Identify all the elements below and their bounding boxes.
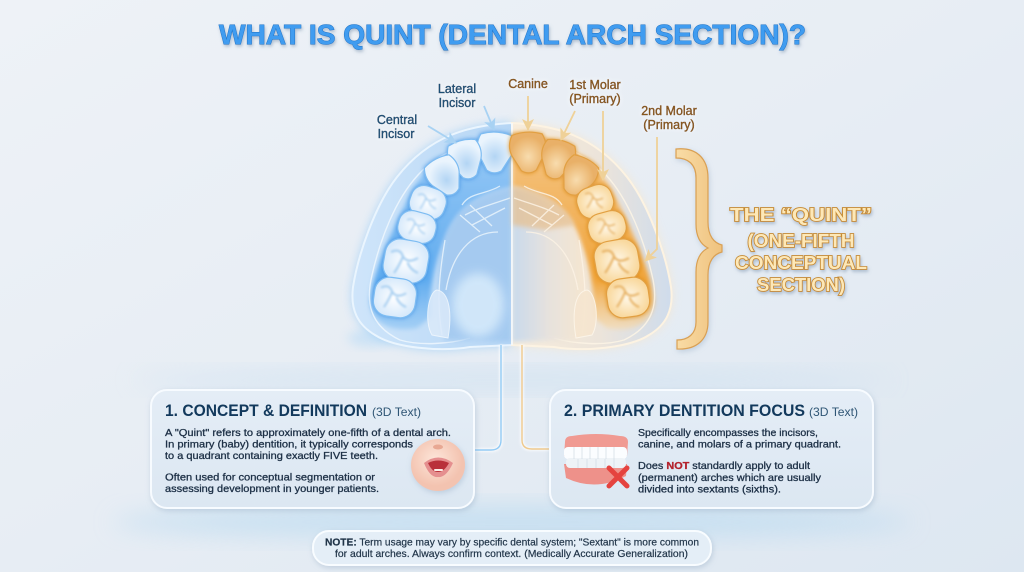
panel 1 body text: to a quadrant containing exactly FIVE teeth. — [165, 450, 378, 462]
panel 1 body text: assessing development in younger patients. — [165, 483, 379, 495]
quint callout: (ONE-FIFTH — [748, 231, 854, 251]
panel 2 body text — [638, 427, 841, 496]
arrow: lateral incisor — [484, 106, 494, 130]
orange tooth fissures — [585, 193, 639, 307]
title: WHAT IS QUINT (DENTAL ARCH SECTION)? — [219, 19, 806, 50]
label: 1st molar: 1st Molar — [569, 78, 621, 92]
midline — [511, 123, 513, 345]
blue tooth fissures — [381, 194, 436, 307]
panel 2 body text: Specifically encompasses the incisors, — [638, 427, 818, 439]
icon: adult dentures with red cross — [564, 434, 628, 486]
arch right half: orange — [512, 123, 672, 349]
connector: arch to panel 1 — [474, 345, 501, 450]
heading 1: 1. CONCEPT & DEFINITION — [165, 402, 367, 420]
arrow: central incisor — [428, 126, 456, 143]
quint callout: CONCEPTUAL — [735, 253, 867, 273]
panel 2: primary dentition focus — [550, 390, 873, 508]
orange teeth — [509, 131, 652, 320]
glow around arch — [348, 123, 672, 349]
label: central incisor: Central — [377, 113, 417, 127]
label: lateral incisor: Incisor — [439, 96, 475, 110]
heading 2 note: (3D Text) — [809, 405, 858, 419]
icon: baby mouth — [411, 439, 465, 491]
heading 2: 2. PRIMARY DENTITION FOCUS — [564, 402, 805, 420]
heading 1 note: (3D Text) — [372, 405, 421, 419]
arrow: first molar upper — [561, 111, 575, 140]
blue teeth — [371, 131, 514, 320]
quint callout — [730, 205, 872, 295]
note: for adult arches. Always confirm context. (Medically Accurate Generalization) — [335, 548, 688, 560]
panel 2 body text: divided into sextants (sixths). — [638, 484, 781, 496]
connector: arch to panel 2 — [522, 345, 550, 449]
panel 2 body text: (permanent) arches which are usually — [638, 472, 822, 484]
arrow: second molar — [645, 137, 657, 261]
label: central incisor: Incisor — [378, 127, 414, 141]
arrow: first molar lower — [602, 111, 604, 180]
panel 1 body text: In primary (baby) dentition, it typically corresponds — [165, 438, 413, 450]
quint callout: THE “QUINT” — [730, 205, 872, 225]
panel 2 body text: canine, and molars of a primary quadrant. — [638, 438, 841, 450]
panel 2 body text: Does NOT standardly apply to adult — [638, 460, 810, 472]
panel 1 body text: Often used for conceptual segmentation or — [165, 472, 376, 484]
arrow: canine — [527, 96, 529, 130]
panel 1 body text: A "Quint" refers to approximately one-fifth of a dental arch. — [165, 427, 451, 439]
label: 1st molar: (Primary) — [569, 92, 621, 106]
arrows to teeth — [428, 96, 657, 261]
label: 2nd molar: (Primary) — [643, 118, 695, 132]
label: lateral incisor: Lateral — [438, 82, 476, 96]
panel 1: concept and definition — [151, 390, 474, 508]
arch left half: blue — [352, 123, 512, 349]
note: NOTE: Term usage may vary by specific dental system; "Sextant" is more common — [325, 536, 699, 548]
tooth labels — [377, 77, 697, 141]
quint callout: SECTION) — [757, 275, 845, 295]
note — [313, 531, 711, 565]
curly brace — [676, 149, 722, 349]
label: canine: Canine — [508, 77, 548, 91]
dental arch illustration — [348, 123, 672, 349]
label: 2nd molar: 2nd Molar — [641, 104, 697, 118]
panel 1 body text — [165, 427, 451, 495]
